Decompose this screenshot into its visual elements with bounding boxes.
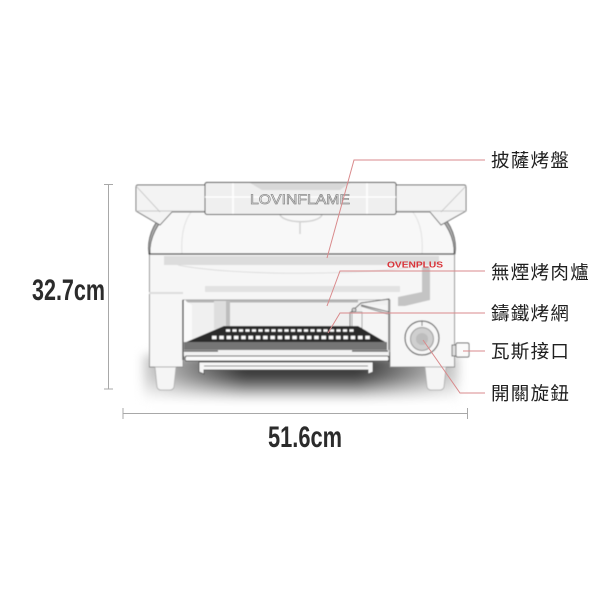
floor shadow <box>143 355 459 401</box>
leader: pizza pan <box>327 160 485 258</box>
leader: gas connector <box>463 350 485 352</box>
label: gas connector: 瓦斯接口 <box>491 341 570 362</box>
oven opening <box>183 300 390 362</box>
label: knob: 開關旋鈕 <box>491 383 570 404</box>
label: cast iron grate: 鑄鐵烤網 <box>491 303 570 324</box>
height dimension line <box>104 184 113 389</box>
label: pizza pan: 披薩烤盤 <box>491 150 570 171</box>
left foot <box>155 367 176 390</box>
gas connector <box>452 343 469 357</box>
leader: smokeless grill <box>327 271 485 306</box>
right bracket <box>350 299 389 340</box>
front handle panel <box>205 182 396 214</box>
oven illustration <box>136 182 469 390</box>
brand: OVENPLUS: OVENPLUS <box>387 260 443 270</box>
width dimension line <box>123 408 468 419</box>
pull-out tray <box>184 350 389 361</box>
lower drip tray <box>199 362 373 374</box>
leader: cast iron grate <box>328 313 485 333</box>
width value: 51.6cm <box>268 421 342 454</box>
label: smokeless grill: 無煙烤肉爐 <box>491 262 590 283</box>
cast iron grill <box>184 326 387 350</box>
brand: LOVINFLAME: LOVINFLAME <box>250 191 350 207</box>
right foot <box>425 367 446 390</box>
lid wings <box>136 185 466 225</box>
lid dome <box>149 207 455 254</box>
control knob <box>405 321 439 355</box>
body <box>149 254 454 367</box>
height value: 32.7cm <box>32 274 105 307</box>
leader: knob <box>423 340 485 393</box>
